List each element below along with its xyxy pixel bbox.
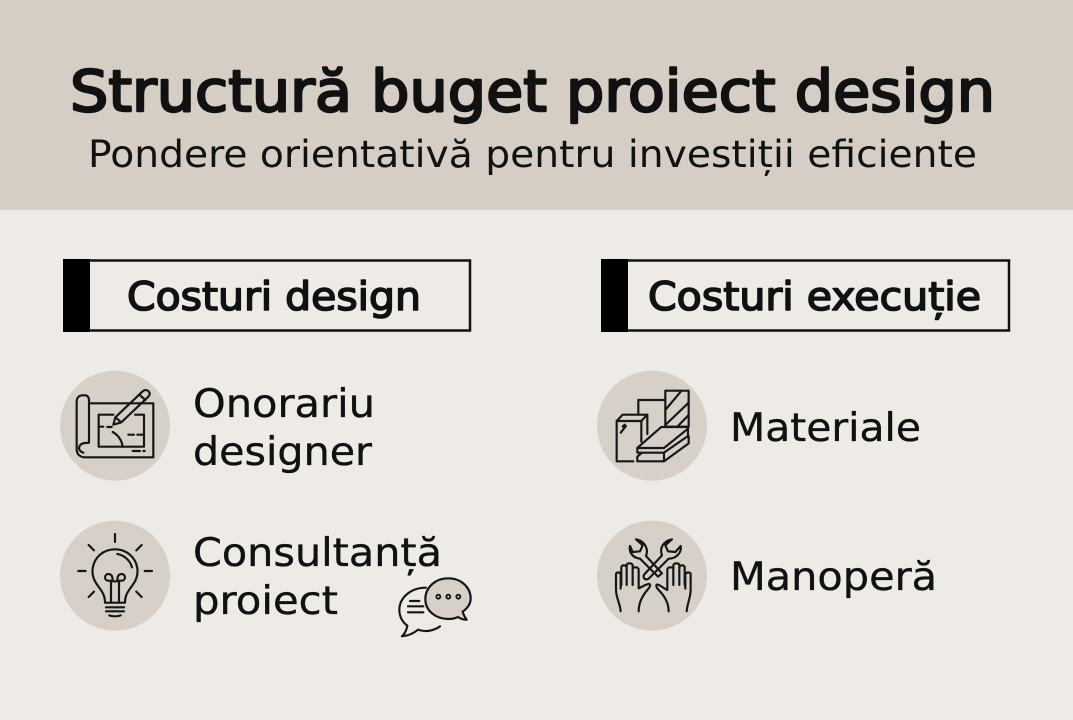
heading: costuri design: Costuri design	[127, 275, 421, 320]
label: materiale: Materiale	[730, 406, 921, 451]
label: consultanta: Consultanță	[193, 531, 442, 576]
icon: blueprint and pencil	[60, 371, 170, 481]
label: proiect: proiect	[193, 579, 338, 624]
label: manopera: Manoperă	[730, 555, 937, 600]
header band	[0, 0, 1073, 210]
icon: light bulb	[60, 521, 170, 631]
icon: hands and wrenches	[597, 521, 707, 631]
heading: costuri design	[63, 259, 470, 332]
item: materiale	[597, 371, 921, 481]
panel: costuri executie	[597, 259, 1009, 631]
icon: speech bubbles	[399, 578, 471, 636]
heading: costuri executie	[601, 259, 1009, 332]
icon: material stacks	[597, 371, 707, 481]
label: designer: designer	[193, 430, 373, 475]
panel: costuri design	[60, 259, 471, 636]
heading: costuri executie: Costuri execuție	[648, 275, 981, 320]
item: consultanta proiect	[60, 521, 471, 636]
subtitle: Pondere orientativă pentru investiții eficiente	[88, 133, 977, 176]
item: onorariu designer	[60, 371, 375, 481]
label: onorariu: Onorariu	[193, 382, 375, 427]
title: Structură buget proiect design	[70, 59, 995, 125]
item: manopera	[597, 521, 937, 631]
